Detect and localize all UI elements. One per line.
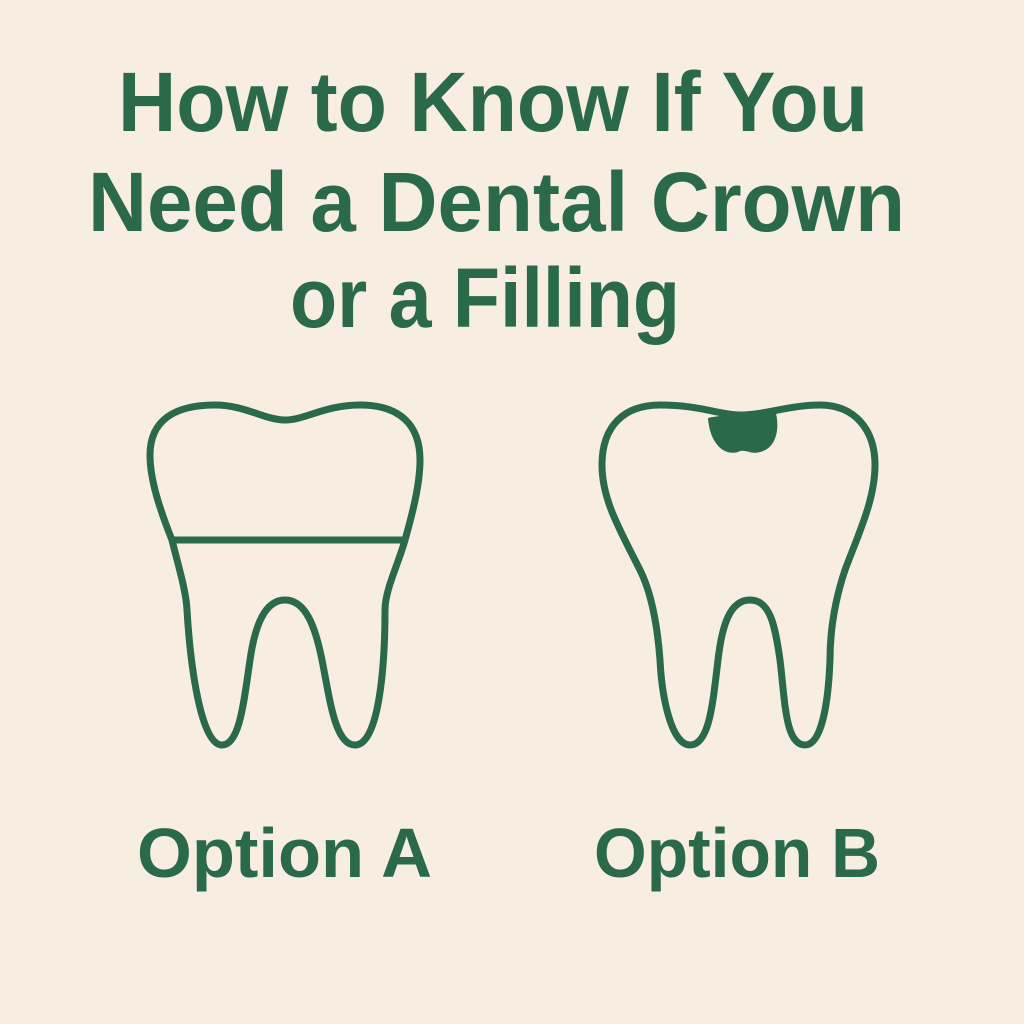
title [88,55,905,345]
title: Need a Dental Crown [88,155,905,249]
label: Option B: Option B [594,814,880,892]
title: or a Filling [290,251,680,345]
icon: tooth with crown (Option A) [150,405,420,745]
title: How to Know If You [118,55,868,149]
label: Option A: Option A [137,814,432,892]
cavity [708,410,777,453]
icon: tooth with cavity (Option B) [602,405,875,745]
